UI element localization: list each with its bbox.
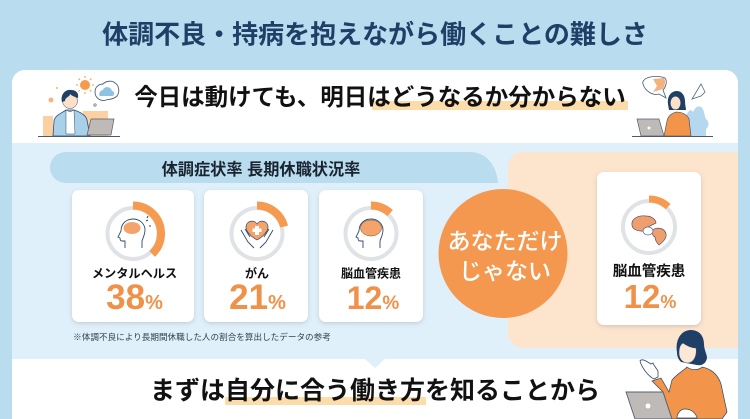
card: cerebrovascular: 脳血管疾患 bbox=[341, 266, 401, 280]
icon: brain section bbox=[632, 216, 666, 245]
illustration: man at laptop bbox=[38, 76, 120, 136]
icon: head with brain bbox=[356, 219, 383, 248]
card: cerebrovascular: 12% bbox=[347, 280, 399, 316]
card: right cerebrovascular: 脳血管疾患 bbox=[613, 262, 686, 280]
heading: top message: 今日は動けても、明日はどうなるか分からない bbox=[134, 84, 626, 110]
illustration: woman waving at laptop bbox=[626, 330, 727, 419]
card: mental health: メンタルヘルス bbox=[92, 266, 177, 280]
icon: head with brain bbox=[118, 216, 151, 248]
callout circle: あなただけ bbox=[448, 228, 562, 254]
callout circle: じゃない bbox=[459, 258, 551, 284]
title: 体調不良・持病を抱えながら働くことの難しさ bbox=[102, 20, 648, 50]
donut: 38% bbox=[105, 206, 161, 262]
heading: bottom message: まずは自分に合う働き方を知ることから bbox=[150, 377, 600, 405]
card: cancer bbox=[204, 190, 308, 322]
donut: 21% bbox=[229, 206, 285, 262]
panel: peach background bbox=[508, 152, 738, 348]
card: cancer: がん bbox=[245, 266, 269, 280]
card: right cerebrovascular: 12% bbox=[624, 278, 676, 315]
pill: section heading: 体調症状率 長期休職状況率 bbox=[162, 161, 360, 179]
donut: 12% bbox=[343, 206, 399, 262]
pill: section heading bbox=[50, 152, 498, 183]
donut: 12% bbox=[621, 199, 677, 255]
callout circle bbox=[438, 189, 568, 318]
card: mental health: 38% bbox=[106, 278, 163, 317]
illustration: woman at laptop bbox=[632, 76, 713, 136]
footnote: ※体調不良により長期間休職した人の割合を算出したデータの参考 bbox=[73, 331, 331, 342]
card: cancer: 21% bbox=[229, 278, 286, 317]
card: mental health bbox=[72, 190, 194, 322]
icon: heart in hands bbox=[241, 221, 273, 248]
card: right cerebrovascular bbox=[597, 172, 701, 325]
card: cerebrovascular bbox=[319, 190, 423, 322]
